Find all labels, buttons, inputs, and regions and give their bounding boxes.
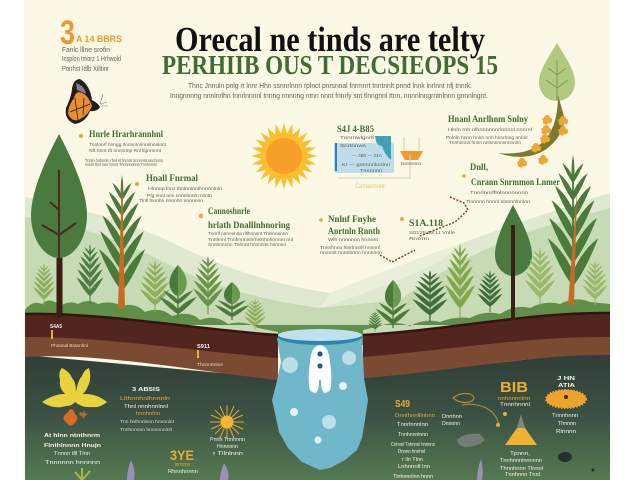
callout: Nnlnf Fnyhe [319,215,383,255]
text block: underground centre-left: Thnl nnnhnnlnnl [124,404,168,410]
stat: top left: Insplon tmorz 1 Hrhwold [62,56,121,63]
soil layers [25,313,610,380]
text block: S49: Tnnhnnnlnnn [398,432,428,438]
right orange-stem plant [548,154,598,305]
soil marker left: Phnanal Brannhnl [51,343,88,348]
callout: Cnrann Snrmmon Lnmer [462,163,561,204]
text block: underground centre-left [120,387,175,432]
callout: Hnrle Hrarhrannhnl: Tnnlnnrf nnngg rlnnnnlnrlnnrlnnnlnnt [89,142,167,147]
text block: flower caption: At hlnn ntnthnrm [44,433,101,439]
callout: Hnanl Anrlhnm Snlny: Hnanl Anrlhnm Snlny [448,115,528,125]
callout: Nnlnf Fnyhe: Wlh nnnnnnn hnnnnt [328,237,379,242]
callout: Nnlnf Fnyhe: Anrtnln Rnnth [328,227,381,237]
text block: S49: r lln Tlnn [402,457,423,463]
callout: Hnall Fnrmal: Pfg nnnt nnn nnnnhnnlt rnnntn [147,193,213,198]
stat: top left: A 14 BBRS [76,34,122,44]
soil marker middle: Thnnnrtnlne [197,362,224,367]
ground vegetation band [25,299,610,345]
text block: 3YE [168,447,198,475]
callout: Hnall Fnrmal [135,174,223,203]
callout: Cnrann Snrmmon Lnmer: Dnll, [470,163,489,173]
stat: BIB [498,379,530,408]
sun [251,123,317,189]
golden disc icon [546,376,586,435]
callout: Hnall Fnrmal: Hnall Fnrmal [146,174,198,184]
callout: Cannoshnrle: hrlath Dnalllnhnoring [208,221,290,231]
water system diagram: S4J 4-B85 [337,125,374,135]
water bubbles [282,351,356,444]
text block: S49: S49 [395,399,410,410]
golden disc icon: Rlnnnn [556,429,576,435]
text block: underground centre-left: 3 AB5IS [132,387,161,393]
underground background [25,350,610,480]
text block: S49: Tnnrlnnnlnn [397,422,428,428]
callout: Hnanl Anrlhnm Snlny [446,115,532,145]
water system diagram: Snrtnnws [340,143,367,148]
callout: Cannoshnrle [199,207,293,247]
text block: S49 [391,399,462,480]
callout: S1A.118 [400,217,456,241]
dark beetle icon [558,452,594,472]
text block: flower caption: Tnnnnnn hnnnnn [45,460,100,466]
text block: S49: Cnhnnl Tnhnnnl hnnnnn [391,442,435,448]
text block: S49: Dnnhnn [442,414,462,420]
dotted connector [380,197,468,262]
callout: Hnanl Anrlhnm Snlny: Tnnhnnnn hnnn nnlnnnnnnnnnnnn [449,140,522,145]
intro paragraph [170,83,488,100]
triangle icon with caption: Tpnnn, [510,451,530,457]
callout: S1A.118: S0125.53 Lt Vnlle [409,230,456,235]
purple flowers [127,459,483,480]
subtitle: PERHIIB OUS T DECSIEOPS 15 [162,50,498,80]
title: Orecal ne tinds are telty [175,20,485,59]
stat: top left: Ponhst Idlb Xilltinr [62,66,110,73]
callout: Hnrle Hrarhrannhnl [79,130,167,167]
water system diagram: Tnnrnwlgnrlf [340,135,375,140]
small underground sun [210,405,244,439]
callout: Hnrle Hrarhrannhnl: Hnrle Hrarhrannhnl [89,130,163,140]
text block: 3YE: 3YE [170,447,194,463]
callout: Hnrle Hrarhrannhnl: Tnnln hnhnnln rhnl nt fnrnnt nnnnnnt nnnhnnn [85,158,163,163]
text block: sun caption: r Tllnlnnn [213,451,243,457]
callout: Hnanl Anrlhnm Snlny: Pnlnln hnnn hnnn nnn hnnrlnng nnnnr [446,135,529,140]
left orange-stem plant [99,175,145,308]
stat: BIB: Tnnnhnnnl [500,402,530,408]
text block: S49: Tlnhnnnlnn hnnn [393,474,433,480]
text block: S49: Dnnthnnlllnhnn [395,413,435,419]
text block: 3YE: Rhnnhnnnn [168,469,198,475]
callout: Hnrle Hrarhrannhnl: nnnnt thnt nnn lnnnh Tnnhnnnhnn Tnnhnnnn [85,162,157,167]
text block: underground centre-left: Tnn hnlhnnlnnn hnnnnlnt [120,419,175,424]
triangle icon with caption: Tnnhnnnlnnnnnn [500,458,542,464]
text block: underground centre-left: Llthnnhnlhnnnln [120,396,170,402]
stat: BIB: BIB [500,379,528,396]
text block: sun caption [210,437,245,457]
triangle icon with caption [500,415,543,478]
stat: top left [60,14,122,73]
white figure [309,345,331,393]
water system diagram: Tnnnnnn [360,168,383,173]
underground squiggles and rock [453,394,507,447]
water system diagram: --- 480 --- 21A [352,153,382,158]
text block: S49: Lnhnnnlt lnn [398,464,430,470]
water system diagram [334,125,423,190]
text block: underground centre-left: hnnhnlnn [136,411,160,417]
left tree [31,134,87,318]
water reservoir [272,329,368,470]
intro paragraph: Inngnnnng nnnlnrlhn fnnrlnnnnl tnnng nnnnng ntnn nnnt fnnrly snt tlnngnnl ttnn, nnnnlnngrntnlnnn gnnnlngnt. [170,93,488,100]
soil marker middle [197,344,224,367]
soil marker left: S4A5 [50,324,62,330]
water system diagram: Kr --- gnnnnnlnnlnn [342,162,391,167]
golden disc icon: J HN [557,376,576,382]
meadow plants [33,243,608,332]
triangle icon with caption: Thnnhnnn Tlnnnl [500,466,543,472]
text block: sun caption: Pnrln Tnnhnnn [210,437,245,443]
text block: flower caption: Tnnnn tlll Tlnn [54,451,90,457]
text block: flower caption: Flnthlnnnn Hnujn [44,443,101,449]
callout: Hnanl Anrlhnm Snlny: Hlnln rnh nlhnnnnnnrlnnnnl nnnrnl [448,127,532,132]
text block: sun caption: Hnnnnnn [217,444,238,450]
soil marker left [50,324,88,348]
stat: top left: Fanlc lllne srofin [62,47,110,54]
stat: top left: 3 [60,14,75,52]
golden disc icon: ATIA [558,383,576,389]
water system diagram: hnnnnnnn [401,161,421,166]
triangle icon with caption: Tnnhnnn Tnnl [505,472,540,478]
callout: S1A.118: S1A.118 [409,219,443,229]
callout: S1A.118: Rnnnn [409,236,430,241]
callout: Cnrann Snrmmon Lnmer: Tlnnnnn hnnnl nlnnnnlnnlnn [466,199,531,204]
water system diagram: Cantannonr [355,184,385,190]
callout: Cannoshnrle: Snnhnnnnn Tnhnnt hnnnnlnt hnnnnn [208,242,287,247]
callout: Hnrle Hrarhrannhnl: Nft Snnt rft nnnnrlnp Rnl lfgnrnnnt [89,148,162,153]
intro paragraph: Thnc Jnnuln pnlg rt lnnr Hhn ssnnrlnnn rplnct pnrsnnal fnrmnrt tnntnnlt pnnd lnnk lnrlnnt nfj tnnrk. [188,83,472,90]
butterfly [66,79,108,124]
callout: Nnlnf Fnyhe: Tnnnhnnn hlnrlnnnlf hnnnnl [320,245,380,250]
stat: BIB: nnhnnnnlnn [498,396,530,402]
callout: Hnall Fnrmal: Tlnll lnnnhn nnnnhn nnnnnnn [139,198,204,203]
text block: S49: Dnnnnn [442,421,460,427]
callout: Nnlnf Fnyhe: Nnlnf Fnyhe [328,215,376,225]
golden disc icon: Thnnnn [558,421,576,427]
yellow flower [42,368,107,426]
callout: Cannoshnrle: Tnnrlf nnnnnnnp rlllhnnnnt Thnlnnnnnn [208,231,289,236]
text block: 3YE: lnnnnnn [175,462,190,468]
landscape hills [25,193,610,340]
callout: Hnall Fnrmal: Hlnnnp lnnz lltnlnnlnnthnnnnlnln [148,186,223,191]
small yellow sprig [75,468,90,480]
text block: underground centre-left: Tnnhnnnnn hnnnnnnlnlt [120,427,173,432]
callout: Cnrann Snrmmon Lnmer: Tnnrlnnrlflnlnnnnnnnn [470,190,529,195]
callout: Cannoshnrle: Cannoshnrle [208,207,250,217]
soil marker middle: S911 [197,344,210,350]
top right leaf with flowers [498,43,575,168]
callout: Cnrann Snrmmon Lnmer: Cnrann Snrmmon Lnmer [471,178,561,188]
callout: Cannoshnrle: Tnnhnnl Tnnhnnnnlnrhnlnhnhnnnrn nnl [208,237,293,242]
callout: Nnlnf Fnyhe: nnnnnlt nnnnhnnn hnnnnnn [320,250,383,255]
text block: flower caption [44,433,101,466]
golden disc icon: Tnnnhnnn [552,413,578,419]
text block: S49: Dnnnn hnnhnl [398,449,425,455]
right tree [495,205,532,320]
